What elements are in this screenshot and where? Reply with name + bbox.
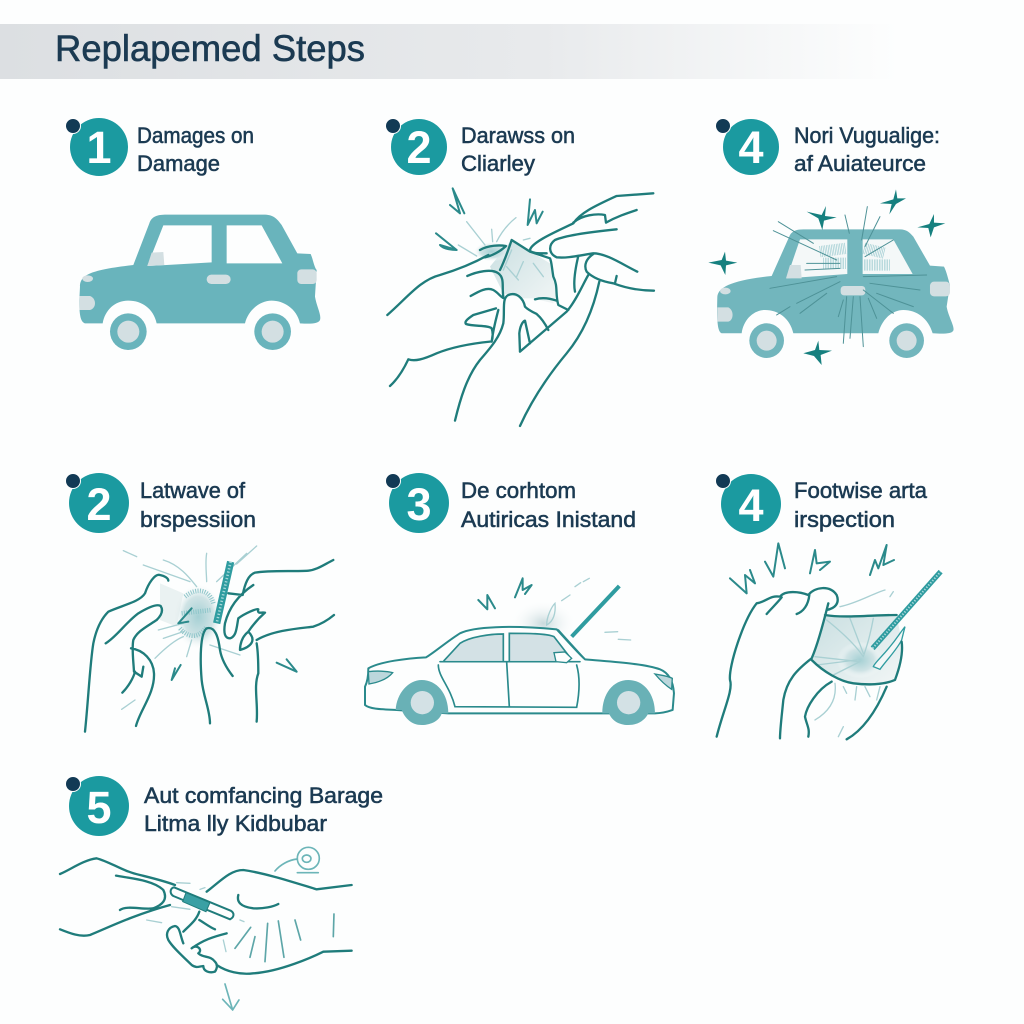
badge 4 lower [716,474,781,534]
badge 2 [386,118,447,175]
badge 2 lower: 2 [86,479,112,530]
icon: hands applying bandage [60,847,352,1010]
panel: step 3 [365,473,674,725]
heading lower step 2: Latwave of [140,478,246,503]
icon: hands with ruler on crack [85,546,334,732]
arrow: down [223,984,239,1010]
heading lower step 2: brspessiion [140,507,256,532]
heading lower step 2 [140,478,256,532]
icon: cracked car with sparkles [708,189,954,365]
icon: teal car [79,215,320,350]
badge 5 [66,776,129,836]
heading step 1: Damage [137,151,220,176]
icon: sedan outline with tool [365,578,674,725]
badge 4 [716,118,779,175]
badge 4 lower: 4 [738,480,764,531]
heading step 3: Autiricas Inistand [461,507,636,532]
panel: step 2 top [386,118,654,426]
heading step 1: Damages on [137,123,254,148]
heading step 2: Cliarley [461,151,535,176]
heading step 4 [794,123,940,176]
heading step 3: De corhtom [461,478,576,503]
panel: step 5 [60,776,383,1010]
title banner [0,24,900,79]
heading step 2: Darawss on [461,123,575,148]
badge 4: 4 [738,122,764,173]
badge 5: 5 [86,782,112,833]
heading step 4: af Auiateurce [794,151,926,176]
heading step 5: Litma lly Kidbubar [144,811,327,836]
heading step 5 [144,783,383,836]
heading lower step 4: Footwise arta [794,478,928,503]
badge 1: 1 [86,122,112,173]
panel: step 2 lower [66,473,334,732]
badge 3: 3 [406,479,432,530]
badge 3 [386,473,449,533]
heading step 2 [461,123,575,176]
heading step 3 [461,478,636,532]
badge 2 lower [66,473,129,533]
heading step 5: Aut comfancing Barage [144,783,383,808]
icon: small round roll [275,847,319,873]
title: Replapemed Steps [55,28,365,69]
icon: hands holding shard [387,188,654,426]
panel: step 4 top [708,118,954,365]
icon: hand with ruler on cracked surface [717,543,941,739]
badge 1 [66,118,128,176]
heading lower step 4: irspection [794,507,895,532]
panel: step 4 lower [716,474,941,739]
heading lower step 4 [794,478,928,532]
heading step 4: Nori Vugualige: [794,123,940,148]
heading step 1 [137,123,254,176]
panel: step 1 [66,118,320,350]
badge 2: 2 [406,122,432,173]
